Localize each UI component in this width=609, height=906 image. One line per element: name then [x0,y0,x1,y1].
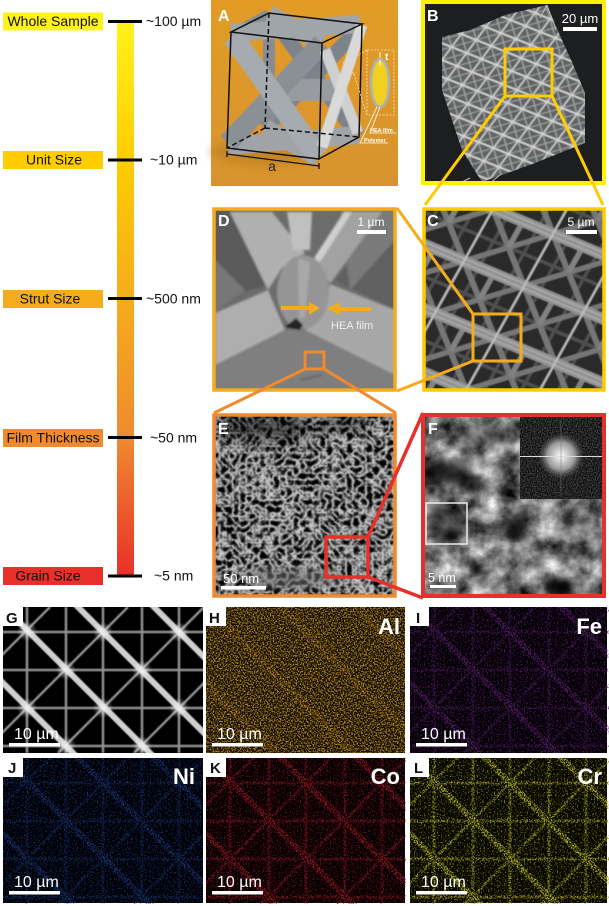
label L: L [414,760,423,777]
strut cross-section inset [343,50,396,144]
scale bar 50 nm: 50 nm [223,571,259,586]
tick: whole sample [3,12,201,30]
selection square [326,537,368,577]
label K [206,758,226,777]
FFT inset [520,417,602,499]
scale bar: 10 µm [14,726,59,743]
panel J: Ni map [3,758,203,904]
panel L: Cr map [410,758,609,904]
Fe signal [410,607,609,753]
tick: strut size [3,290,201,308]
HEA film arrows [281,302,371,315]
tick: grain size [3,567,193,585]
label H [206,607,226,627]
scale bar 5 um [566,215,597,234]
label G: G [6,610,18,627]
panel F: HRTEM [423,415,604,597]
element name: Fe [576,614,602,639]
panel D: node SEM [214,209,395,390]
Cr signal [410,758,609,904]
scale bar 20 um: 20 µm [562,11,598,26]
label I: I [416,610,420,627]
tick: film thickness [3,429,197,447]
label E: E [218,421,229,438]
tick: unit size [3,151,197,169]
scale bar: 10 µm [421,726,466,743]
selection square [505,49,552,96]
tick: grain size: ~5 nm [154,568,193,584]
white analysis square [426,503,467,544]
label F: F [428,421,438,438]
scale bar: 10 µm [217,874,262,891]
panel B: whole lattice SEM [423,0,604,185]
scale bar 5 um: 5 µm [568,215,594,229]
lattice [3,607,203,753]
lattice struts [228,13,362,158]
cube wireframe [227,13,362,159]
panel C: unit cells SEM [424,209,604,390]
panel I: Fe map [410,607,609,753]
scale bar: 10 µm [217,726,262,743]
Co signal [206,758,406,904]
label K: K [210,760,221,777]
label D: D [218,213,230,230]
gradient scale bar [117,22,134,576]
scale bar 1 um: 1 µm [358,215,384,229]
dimension a: a [268,158,276,174]
HEA film label: HEA film [331,320,373,332]
selection square [473,314,521,361]
scale bar 1 um [357,215,386,234]
tick: film thickness: Film Thickness [6,430,100,446]
label A: A [218,8,230,25]
tick: whole sample: ~100 µm [146,13,201,29]
label J [3,758,23,777]
Ni signal [3,758,203,904]
strut cross-section inset: t [385,52,389,63]
tick: unit size: ~10 µm [150,152,197,168]
element name: Ni [173,764,195,789]
lattice sample [442,4,585,181]
label I [410,607,429,627]
tick: strut size: ~500 nm [146,290,201,306]
tick: grain size: Grain Size [15,568,81,584]
panel K: Co map [206,758,406,904]
strut cross-section inset: Polymer [364,138,387,144]
label J: J [8,760,16,777]
scale bar: 10 µm [421,874,466,891]
label B: B [427,8,439,25]
element name: Al [378,614,400,639]
node structure [215,210,395,390]
scale bar: 10 µm [14,874,59,891]
scale bar 50 nm [221,571,266,590]
label C: C [427,213,439,230]
tick: film thickness: ~50 nm [150,430,197,446]
element name: Cr [578,764,602,789]
zoom connector lines [214,96,603,598]
panel G: SEM top view [3,607,203,753]
label G [3,607,23,627]
element name: Co [371,764,400,789]
panel A: unit cell render [210,0,398,186]
scale bar column [3,12,201,585]
dimension a [227,151,319,174]
label H: H [209,610,220,627]
tick: strut size: Strut Size [20,290,81,306]
panel E: film surface micrograph [214,414,395,596]
tick: unit size: Unit Size [26,152,82,168]
Al signal [206,607,406,753]
selection square [305,352,324,369]
panel H: Al map [206,607,406,753]
label L [410,758,429,777]
scale bar 5 nm: 5 nm [428,571,456,585]
tick: whole sample: Whole Sample [7,13,99,29]
strut cross-section inset: HEA film [370,128,393,134]
